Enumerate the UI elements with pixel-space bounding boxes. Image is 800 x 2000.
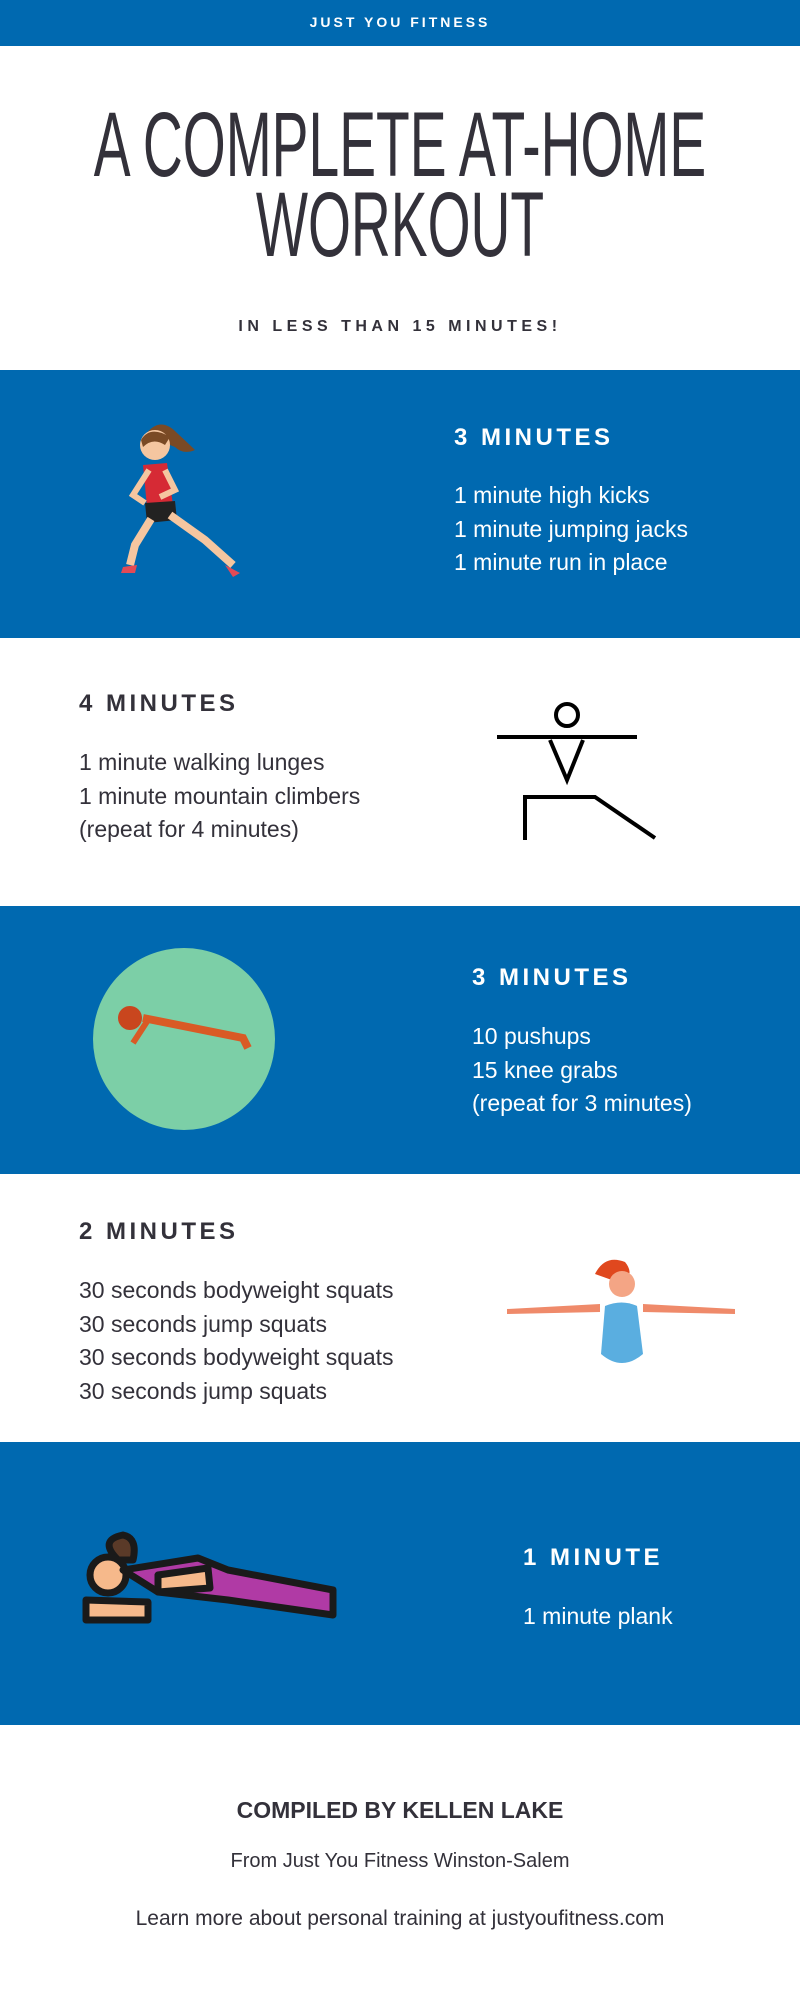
icon: woman arms out xyxy=(507,1260,735,1363)
footer: compiled by: COMPILED BY KELLEN LAKE xyxy=(237,1797,563,1823)
panel: 4 minutes: 4 MINUTES xyxy=(79,690,239,717)
panel: 3 minutes cardio: 1 minute run in place xyxy=(454,549,668,575)
panel: 2 minutes: 30 seconds jump squats xyxy=(79,1310,327,1336)
icon: runner xyxy=(121,424,240,577)
title: WORKOUT xyxy=(256,174,544,276)
panel: 3 minutes pushups: 10 pushups xyxy=(472,1023,591,1049)
panel: 3 minutes cardio: 1 minute high kicks xyxy=(454,482,650,508)
title: A COMPLETE AT-HOME xyxy=(94,94,706,196)
icon: plank xyxy=(82,1532,336,1624)
panel: 1 minute xyxy=(0,1442,800,1725)
title xyxy=(94,94,706,276)
panel: 3 minutes pushups: 15 knee grabs xyxy=(472,1056,618,1082)
panel: 1 minute: 1 minute plank xyxy=(523,1603,673,1629)
panel: 1 minute: 1 MINUTE xyxy=(523,1544,663,1571)
panel: 2 minutes: 30 seconds jump squats xyxy=(79,1378,327,1404)
panel: 2 minutes xyxy=(79,1218,735,1404)
panel: 4 minutes: 1 minute walking lunges xyxy=(79,749,324,775)
text: 3 MINUTES xyxy=(454,424,614,451)
panel: 3 minutes pushups: (repeat for 3 minutes) xyxy=(472,1090,692,1116)
panel: 4 minutes xyxy=(79,690,656,842)
panel: 4 minutes: 1 minute mountain climbers xyxy=(79,782,360,808)
panel: 2 minutes: 30 seconds bodyweight squats xyxy=(79,1344,394,1370)
icon: pushup circle xyxy=(93,948,275,1130)
top bar xyxy=(0,0,800,46)
panel: 4 minutes: (repeat for 4 minutes) xyxy=(79,816,299,842)
footer: from: From Just You Fitness Winston-Salem xyxy=(230,1850,570,1872)
subtitle: IN LESS THAN 15 MINUTES! xyxy=(238,318,562,335)
panel: 2 minutes: 2 MINUTES xyxy=(79,1218,239,1245)
panel: 2 minutes: 30 seconds bodyweight squats xyxy=(79,1277,394,1303)
icon: yoga warrior xyxy=(497,702,656,840)
top bar: JUST YOU FITNESS xyxy=(310,14,490,30)
panel: 3 minutes pushups: 3 MINUTES xyxy=(472,964,632,991)
footer: learn more: Learn more about personal training at justyoufitness.com xyxy=(136,1907,664,1930)
panel: 3 minutes cardio xyxy=(0,370,800,638)
panel: 3 minutes cardio: 1 minute jumping jacks xyxy=(454,516,688,542)
panel: 3 minutes pushups xyxy=(0,906,800,1174)
